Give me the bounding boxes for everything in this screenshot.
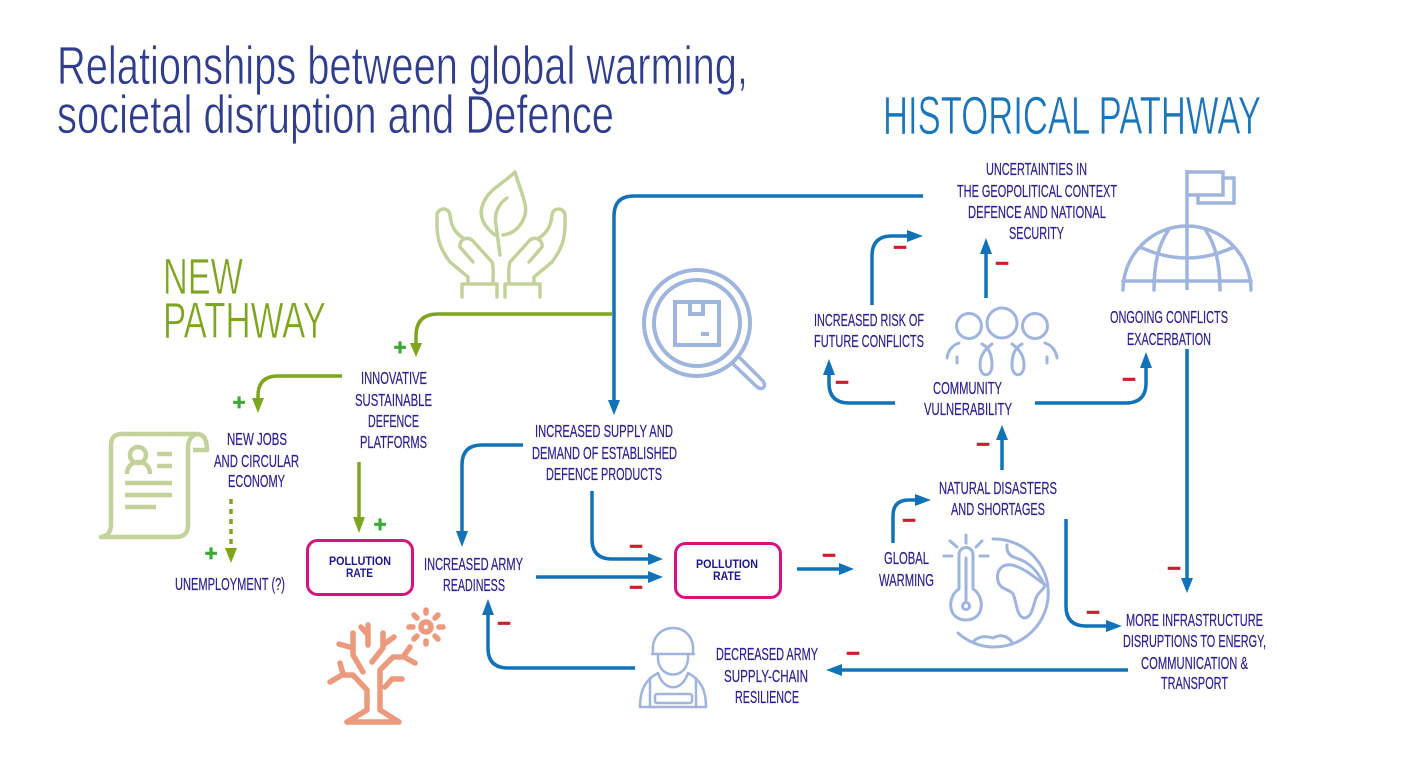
arrow: supply-chain to readiness	[482, 599, 635, 668]
arrow: disasters to infrastructure	[1066, 519, 1122, 632]
arrow: green to innovative platforms	[410, 314, 612, 357]
label: decreased army supply-chain resilience: RESILIENCE	[735, 687, 799, 707]
minus signs: –	[846, 639, 860, 666]
plus signs	[205, 335, 406, 566]
box: pollution rate new pathway	[308, 540, 412, 594]
arrow: uncertainties to supply and demand	[608, 196, 923, 415]
minus signs: –	[1122, 365, 1136, 392]
label: more infrastructure disruptions: DISRUPTIONS TO ENERGY,	[1123, 631, 1266, 651]
minus signs: –	[629, 532, 643, 559]
arrow: pollution to global warming	[797, 563, 854, 575]
arrow: platforms to new jobs	[252, 376, 342, 413]
arrow: disasters to community	[996, 425, 1008, 470]
arrow: supply and demand to pollution	[592, 491, 663, 565]
label: increased risk of future conflicts	[814, 310, 924, 351]
label: new jobs and circular economy	[214, 429, 299, 491]
label: increased army readiness: READINESS	[443, 575, 505, 595]
plus signs: +	[233, 390, 245, 415]
minus signs: –	[629, 573, 643, 600]
icon: earth with thermometer	[944, 535, 1048, 647]
arrow: conflicts to infrastructure	[1181, 349, 1193, 593]
label: more infrastructure disruptions: TRANSPORT	[1161, 673, 1228, 693]
label: ongoing conflicts exacerbation: EXACERBATION	[1127, 329, 1211, 349]
label: increased army readiness	[424, 554, 523, 595]
icon: dead tree and sun	[330, 610, 443, 722]
label: increased risk of future conflicts: INCREASED RISK OF	[814, 310, 924, 330]
title	[57, 36, 748, 145]
plus signs: +	[394, 335, 406, 360]
box: pollution rate new pathway: POLLUTION	[329, 556, 391, 568]
label: natural disasters and shortages: NATURAL DISASTERS	[939, 478, 1057, 498]
plus signs: +	[374, 512, 386, 537]
title: societal disruption and Defence	[57, 85, 614, 145]
label: community vulnerability: COMMUNITY	[933, 378, 1002, 398]
label: uncertainties in geopolitical context: THE GEOPOLITICAL CONTEXT	[957, 181, 1117, 201]
icon: document scroll	[101, 434, 207, 537]
box: pollution rate historical pathway: POLLUTION	[696, 559, 758, 571]
label: more infrastructure disruptions: COMMUNICATION &	[1141, 653, 1248, 673]
minus signs: –	[893, 233, 907, 260]
label: increased supply and demand: DEFENCE PRODUCTS	[546, 464, 662, 484]
minus signs	[497, 233, 1181, 666]
label: natural disasters and shortages: AND SHORTAGES	[951, 499, 1045, 519]
minus signs: –	[995, 249, 1009, 276]
label: uncertainties in geopolitical context: SECURITY	[1009, 223, 1064, 243]
arrow: community to uncertainties	[980, 238, 992, 298]
label: innovative sustainable defence platforms	[355, 368, 432, 452]
arrow: community to ongoing conflicts	[1035, 352, 1152, 403]
label: global warming: WARMING	[879, 570, 934, 590]
arrow: community to future conflicts	[823, 359, 895, 403]
arrow: supply and demand to army readiness	[456, 445, 523, 547]
plus signs: +	[205, 541, 217, 566]
minus signs: –	[835, 368, 849, 395]
arrow: platforms to pollution rate	[353, 462, 365, 533]
label: increased supply and demand: DEMAND OF ESTABLISHED	[532, 443, 677, 463]
label: uncertainties in geopolitical context	[957, 159, 1117, 243]
icon: hands holding leaf	[437, 172, 565, 297]
heading: new pathway: NEW	[163, 248, 243, 305]
heading: new pathway: PATHWAY	[163, 292, 326, 349]
label: community vulnerability	[924, 378, 1012, 419]
label: ongoing conflicts exacerbation	[1110, 307, 1228, 349]
icon: soldier	[640, 628, 706, 707]
label: decreased army supply-chain resilience: SUPPLY-CHAIN	[724, 666, 808, 686]
label: decreased army supply-chain resilience	[716, 644, 818, 707]
label: increased army readiness: INCREASED ARMY	[424, 554, 523, 574]
label: decreased army supply-chain resilience: DECREASED ARMY	[716, 644, 818, 664]
minus signs: –	[1167, 554, 1181, 581]
label: increased risk of future conflicts: FUTURE CONFLICTS	[814, 331, 924, 351]
label: innovative sustainable defence platforms: SUSTAINABLE	[355, 390, 432, 410]
label: new jobs and circular economy: AND CIRCULAR	[214, 451, 299, 471]
box: pollution rate new pathway: RATE	[346, 568, 373, 580]
label: innovative sustainable defence platforms: INNOVATIVE	[361, 368, 427, 388]
minus signs: –	[902, 506, 916, 533]
arrow: dotted jobs to unemployment	[225, 499, 237, 563]
minus signs: –	[822, 541, 836, 568]
icon: magnifier with box	[644, 270, 764, 388]
label: more infrastructure disruptions: MORE INFRASTRUCTURE	[1126, 610, 1263, 630]
arrow: readiness to pollution	[536, 571, 663, 583]
label: innovative sustainable defence platforms: PLATFORMS	[360, 432, 427, 452]
arrow: infrastructure to supply-chain	[826, 664, 1128, 676]
arrow: warming to natural disasters	[893, 494, 931, 543]
label: uncertainties in geopolitical context: DEFENCE AND NATIONAL	[968, 202, 1106, 222]
label: increased supply and demand	[532, 421, 677, 484]
minus signs: –	[1086, 598, 1100, 625]
heading: new pathway	[163, 248, 326, 349]
minus signs: –	[497, 609, 511, 636]
title: Relationships between global warming,	[57, 36, 748, 96]
box: pollution rate historical pathway	[676, 544, 780, 598]
arrow: future conflicts to uncertainties	[872, 230, 923, 305]
label: natural disasters and shortages	[939, 478, 1057, 519]
label: new jobs and circular economy: ECONOMY	[228, 471, 285, 491]
label: community vulnerability: VULNERABILITY	[924, 399, 1012, 419]
box: pollution rate historical pathway: RATE	[713, 571, 741, 583]
label: global warming: GLOBAL	[884, 548, 929, 568]
minus signs: –	[976, 430, 990, 457]
label: increased supply and demand: INCREASED SUPPLY AND	[535, 421, 673, 441]
label: new jobs and circular economy: NEW JOBS	[227, 429, 287, 449]
label: innovative sustainable defence platforms: DEFENCE	[368, 411, 419, 431]
icon: community group	[947, 308, 1057, 375]
label: uncertainties in geopolitical context: UNCERTAINTIES IN	[986, 159, 1087, 179]
label: global warming	[879, 548, 934, 590]
label: ongoing conflicts exacerbation: ONGOING CONFLICTS	[1110, 307, 1228, 327]
icon: globe with flag	[1123, 170, 1251, 290]
label: unemployment: UNEMPLOYMENT (?)	[175, 574, 285, 594]
label: more infrastructure disruptions	[1123, 610, 1266, 693]
